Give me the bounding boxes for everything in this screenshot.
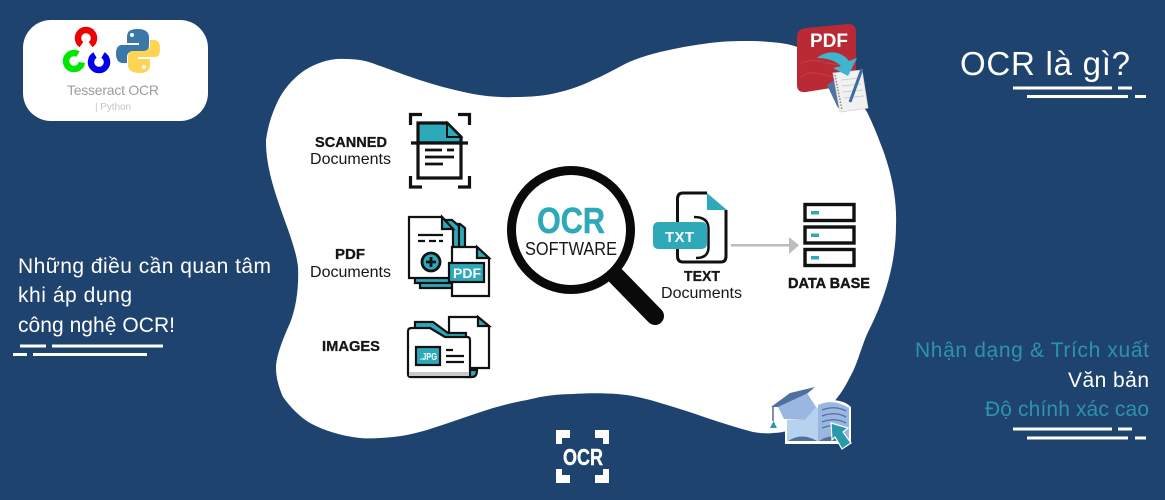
- icon: database: [805, 204, 854, 266]
- icon: image folder: .JPG: [420, 352, 437, 363]
- icon: OpenCV logo: [66, 30, 107, 70]
- icon: scanned document: [410, 114, 470, 187]
- text block: considerations: khi áp dụng: [18, 284, 132, 307]
- label: text documents: [661, 268, 742, 302]
- label: data base: DATA BASE: [788, 275, 870, 292]
- magnifying glass: [512, 170, 655, 316]
- icon: Python logo: [116, 29, 160, 73]
- label: PDF documents: Documents: [310, 264, 391, 281]
- magnifier text: OCR: OCR: [537, 200, 605, 241]
- white blob panel: [266, 41, 896, 438]
- text block: considerations: [18, 255, 271, 337]
- icon: OCR scan mark: OCR: [563, 444, 603, 470]
- label: images: IMAGES: [322, 338, 380, 355]
- logo text: Tesseract OCR: Tesseract OCR: [67, 82, 159, 98]
- label: scanned documents: [310, 134, 391, 168]
- heading: OCR là gì?: OCR là gì?: [960, 45, 1130, 82]
- icon: image folder: [408, 317, 489, 377]
- label: text documents: TEXT: [684, 268, 720, 285]
- text block: recognition and extraction: Độ chính xác cao: [985, 398, 1149, 421]
- icon: book and graduation cap: [770, 387, 851, 449]
- text block: considerations: Những điều cần quan tâm: [18, 255, 271, 278]
- logo text: Python: | Python: [95, 102, 131, 113]
- label: scanned documents: SCANNED: [315, 134, 387, 151]
- label: text documents: Documents: [661, 285, 742, 302]
- icon: text document: TXT: [665, 229, 694, 246]
- label: PDF documents: [310, 246, 391, 281]
- icon: PDF documents: PDF: [453, 265, 481, 281]
- text underline: [13, 344, 163, 356]
- icon: text document: [653, 193, 727, 262]
- text block: recognition and extraction: [915, 339, 1149, 421]
- label: PDF documents: PDF: [335, 246, 365, 263]
- icon: PDF documents: [409, 217, 489, 296]
- text block: recognition and extraction: Nhận dạng & Trích xuất: [915, 339, 1149, 362]
- icon: PDF book: [797, 24, 868, 112]
- text block: considerations: công nghệ OCR!: [18, 314, 175, 337]
- icon: OCR scan mark: [556, 430, 609, 483]
- label: scanned documents: Documents: [310, 151, 391, 168]
- arrow: text to database: [731, 237, 799, 254]
- text underline: [1013, 428, 1146, 440]
- heading underline: [1013, 86, 1146, 98]
- logo card: [23, 20, 208, 121]
- text block: recognition and extraction: Văn bản: [1068, 369, 1149, 392]
- icon: PDF book: PDF: [810, 31, 848, 52]
- magnifier text: SOFTWARE: SOFTWARE: [525, 239, 617, 259]
